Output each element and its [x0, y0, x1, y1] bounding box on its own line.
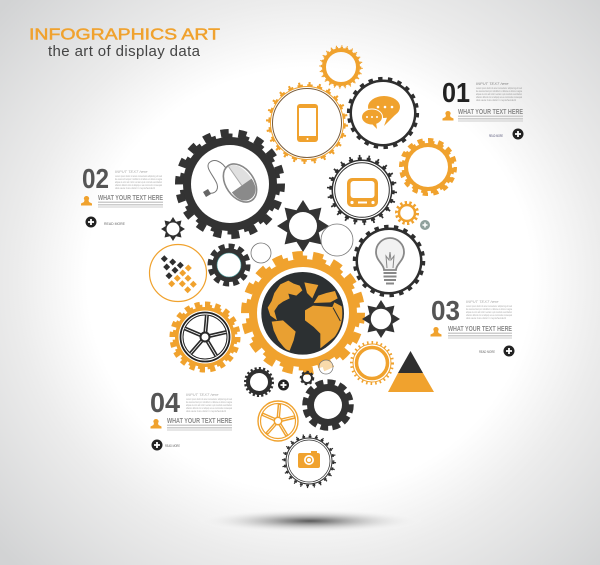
north america: [268, 281, 302, 320]
block 03 text: Lorem ipsum dolor sit amet consectetur adipiscing elit sed: [466, 304, 512, 308]
small thin circle: [251, 243, 271, 263]
block 03 text: ullamco laboris nisi ut aliquip ex ea commodo consequat: [466, 313, 512, 317]
icon: dark spoked wheel: [185, 315, 226, 356]
block 03 text: INPUT TEXT here: [466, 299, 499, 304]
block 01 text: [476, 81, 522, 102]
icon: camera: [298, 451, 320, 468]
block 01 text: do eiusmod tempor incididunt ut labore et dolore magna: [476, 89, 522, 93]
block 03 text: do eiusmod tempor incididunt ut labore et dolore magna: [466, 307, 512, 311]
globe gear: [245, 255, 361, 371]
small black gear: [246, 368, 272, 396]
small orange gear: [396, 202, 418, 224]
block 01 text: Lorem ipsum dolor sit amet consectetur adipiscing elit sed: [476, 86, 522, 90]
block 02 subheading: WHAT YOUR TEXT HERE: [98, 193, 163, 202]
icon: dark diamonds: [161, 255, 184, 279]
block 01 text: INPUT TEXT here: [476, 81, 509, 86]
mouse gear: [179, 133, 281, 235]
icon: grey plus: [420, 220, 430, 230]
icon: plus: [152, 440, 162, 450]
dark sea lines: [333, 308, 340, 321]
block 03 lines: [448, 332, 512, 338]
europe: [314, 291, 338, 303]
icon: light bulb: [376, 238, 404, 284]
block 01 text: aliqua ut enim ad minim veniam quis nostrud exercitation: [476, 92, 522, 96]
top orange gear: [320, 46, 362, 88]
camera gear: [283, 435, 335, 487]
block 02 text: ullamco laboris nisi ut aliquip ex ea commodo consequat: [115, 183, 162, 187]
block 04 text: INPUT TEXT here: [186, 392, 219, 397]
block 04 text: do eiusmod tempor incididunt ut labore et dolore magna: [186, 400, 232, 404]
subtitle: the art of display data: [48, 43, 201, 60]
tiny black gear: [301, 372, 313, 384]
read more label: READ MORE: [489, 134, 503, 138]
block 03: [430, 295, 514, 356]
thin circle: [321, 224, 353, 256]
small right star gear: [362, 300, 400, 338]
read more label: READ MORE: [104, 222, 125, 226]
number 01: 01: [442, 77, 470, 108]
block 04 subheading: WHAT YOUR TEXT HERE: [167, 416, 232, 425]
block 02 text: [115, 169, 162, 190]
phone gear: [267, 83, 347, 163]
thin circle on globe gear: [319, 360, 333, 374]
block 02 text: aliqua ut enim ad minim veniam quis nostrud exercitation: [115, 180, 162, 184]
greenland: [304, 282, 318, 298]
block 03 text: [466, 299, 512, 320]
icon: phone: [297, 104, 318, 142]
africa and asia: [305, 302, 346, 348]
block 04 text: [186, 392, 232, 413]
orange spiky gear: [352, 342, 392, 384]
block 02 text: do eiusmod tempor incididunt ut labore et dolore magna: [115, 177, 162, 181]
icon: plus: [504, 346, 514, 356]
read more label: READ MORE: [479, 350, 495, 354]
floor shadow: [195, 509, 425, 533]
icon: dark plus: [278, 380, 289, 390]
block 04: [150, 387, 232, 450]
block 03 text: duis aute irure dolor in reprehenderit: [466, 316, 506, 320]
icon: TV: [347, 178, 378, 207]
icon: orange diamonds: [168, 264, 197, 293]
block 04 lines: [167, 424, 232, 430]
pyramid: [388, 351, 434, 392]
number 03: 03: [431, 295, 460, 326]
icon: plus: [512, 128, 524, 140]
TV gear: [328, 156, 396, 224]
south america: [272, 320, 296, 352]
icon: plus: [86, 216, 96, 228]
block 02 lines: [98, 202, 163, 208]
block 02 text: duis aute irure dolor in reprehenderit: [115, 186, 155, 190]
title: INFOGRAPHICS ART: [29, 26, 220, 44]
icon: person: [430, 327, 442, 336]
icon: person: [81, 196, 92, 206]
block 04 text: aliqua ut enim ad minim veniam quis nostrud exercitation: [186, 403, 232, 407]
block 04 text: Lorem ipsum dolor sit amet consectetur adipiscing elit sed: [186, 397, 232, 401]
orange wheel: [258, 401, 298, 441]
block 01 lines: [458, 116, 523, 122]
icon: chat bubbles: [362, 96, 400, 129]
chat gear: [348, 78, 418, 148]
number 04: 04: [150, 387, 180, 418]
big black gear: [306, 382, 350, 428]
block 03 subheading: WHAT YOUR TEXT HERE: [448, 324, 512, 333]
block 01: [442, 77, 524, 140]
block 02: [81, 163, 163, 228]
number 02: 02: [82, 163, 109, 194]
eight point star gear: [277, 200, 329, 252]
dark gear: [210, 246, 248, 284]
block 01 text: ullamco laboris nisi ut aliquip ex ea commodo consequat: [476, 95, 522, 99]
icon: person: [442, 111, 454, 120]
right orange gear: [401, 140, 455, 194]
block 01 text: duis aute irure dolor in reprehenderit: [476, 98, 516, 102]
icon: person: [150, 419, 162, 428]
block 02 text: INPUT TEXT here: [115, 169, 148, 174]
icon: computer mouse: [203, 158, 264, 208]
block 03 text: aliqua ut enim ad minim veniam quis nostrud exercitation: [466, 310, 512, 314]
bulb gear: [354, 226, 424, 296]
small dark star gear: [161, 217, 185, 241]
globe: [261, 272, 346, 355]
block 04 text: ullamco laboris nisi ut aliquip ex ea commodo consequat: [186, 406, 232, 410]
read more label: READ MORE: [165, 444, 180, 448]
block 01 subheading: WHAT YOUR TEXT HERE: [458, 107, 523, 116]
orange wheel gear: [172, 304, 238, 370]
arrows circle: [150, 244, 206, 302]
block 04 text: duis aute irure dolor in reprehenderit: [186, 409, 226, 413]
block 02 text: Lorem ipsum dolor sit amet consectetur adipiscing elit sed: [115, 174, 162, 178]
